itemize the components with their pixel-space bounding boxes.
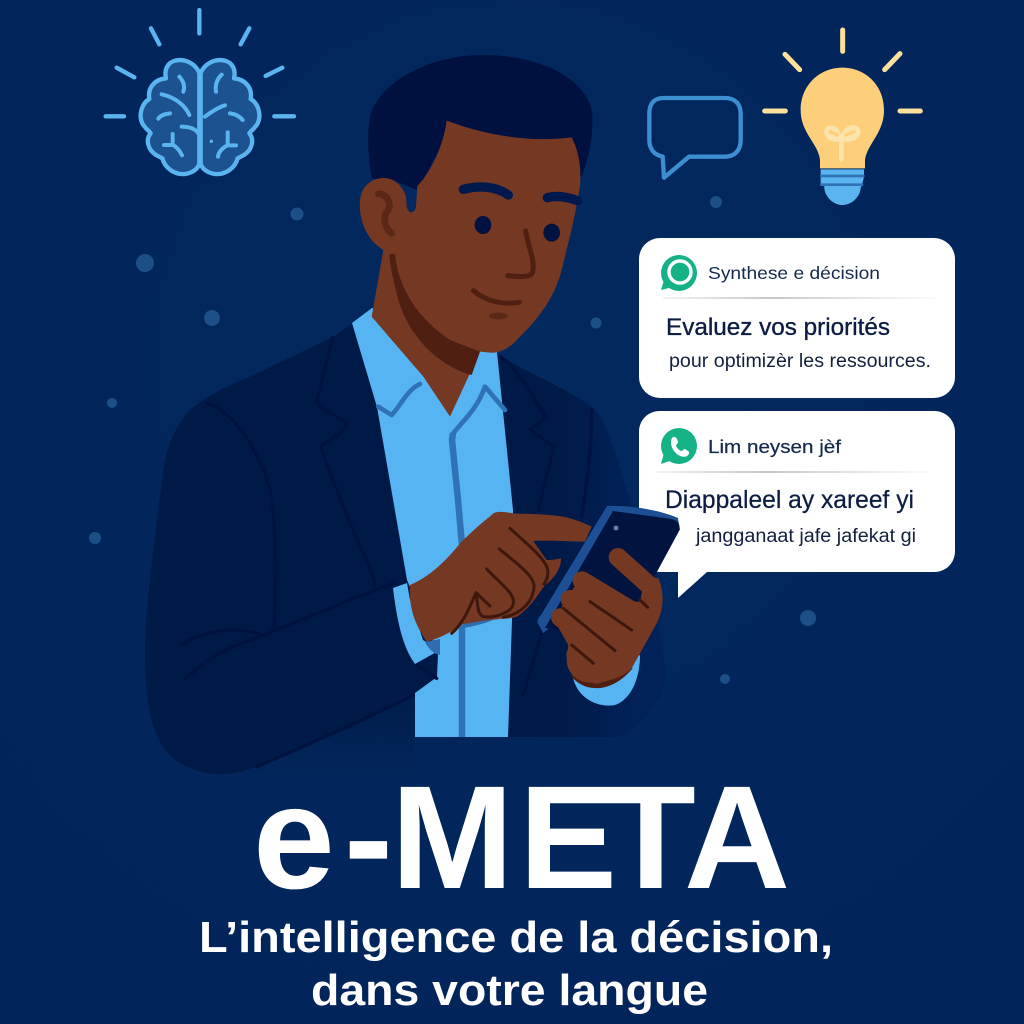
shirt shadow under hand	[425, 619, 495, 655]
nose, mouth and ear lines	[378, 194, 533, 303]
left cuff	[393, 583, 440, 664]
icon: phone badge	[661, 428, 697, 464]
card 1 heading: Evaluez vos priorités	[666, 314, 890, 341]
chin shadow	[389, 254, 480, 375]
shirt placket	[452, 433, 462, 737]
head	[360, 55, 592, 450]
face, ear and neck	[360, 121, 580, 417]
eyebrows	[463, 187, 577, 201]
background dots	[89, 196, 816, 684]
icon: speech bubble	[649, 98, 741, 178]
right shirt cuff	[572, 655, 640, 706]
subtitle line 1: L’intelligence de la décision,	[199, 913, 833, 962]
subtitle line 2: dans votre langue	[311, 966, 708, 1015]
pointing hand	[410, 512, 592, 642]
holding hand	[555, 557, 663, 688]
card 2 heading: Diappaleel ay xareef yi	[665, 486, 914, 514]
phone	[538, 506, 680, 640]
jacket edge lines	[180, 337, 437, 767]
panel: message card 1	[639, 238, 955, 398]
card 2 body: jangganaat jafe jafekat gi	[695, 526, 916, 547]
icon: brain with rays	[106, 10, 294, 174]
card 1 body: pour optimizèr les ressources.	[669, 351, 931, 372]
shirt	[352, 308, 513, 737]
collar lines	[378, 384, 505, 450]
illustration: man using phone	[145, 55, 680, 782]
icon: light bulb with rays	[765, 30, 920, 205]
jacket lower fade	[240, 693, 640, 782]
eyes	[475, 216, 560, 242]
icon: chat badge	[661, 255, 697, 291]
title: e-META	[253, 756, 790, 920]
panel: message card 2	[639, 411, 955, 598]
lower lip	[489, 313, 508, 319]
card 2 header: Lim neysen jèf	[708, 437, 842, 457]
hair	[368, 55, 592, 190]
jacket	[145, 323, 665, 774]
card 1 header: Synthese e décision	[708, 263, 880, 283]
